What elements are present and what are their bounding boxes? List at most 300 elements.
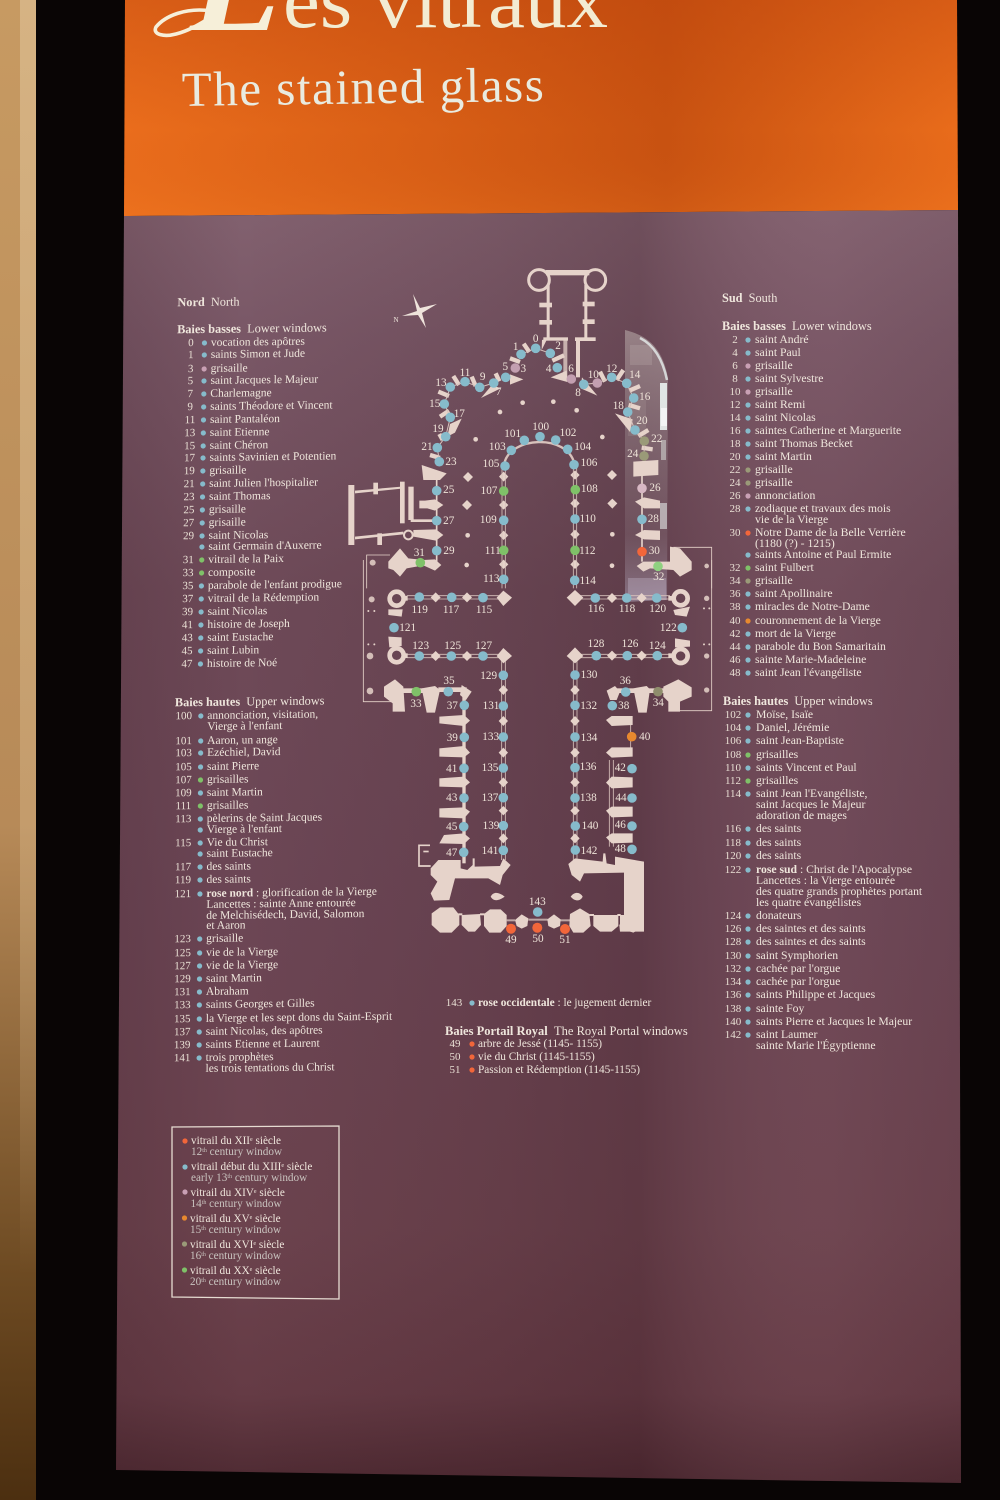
legend: 20th century: 20 [190, 1276, 201, 1288]
plan window numbers [399, 333, 677, 946]
legend: 16th century: siècle [256, 1239, 284, 1251]
plan window numbers: 41 [446, 763, 457, 775]
legend: 15th century: siècle [252, 1213, 281, 1225]
list: north upper windows: 129 [174, 973, 191, 985]
legend: early 13th century: early 13 [191, 1172, 227, 1184]
centre list: west rose and Royal Portal [445, 997, 688, 1076]
plan window numbers: 21 [421, 441, 433, 453]
list: south upper windows: donateurs [756, 909, 802, 922]
legend: 14th century: century window [206, 1198, 282, 1210]
list: south lower windows: 30 [730, 527, 741, 539]
legend box [172, 1126, 339, 1299]
plan window numbers: 141 [482, 845, 498, 857]
plan window numbers: 8 [575, 387, 581, 399]
legend: 12th century: century window [207, 1146, 283, 1158]
list: south lower windows: 10 [730, 386, 741, 398]
heading: Baies basses: Baies basses Lower windows [722, 319, 872, 333]
plan window numbers: 1 [513, 341, 518, 353]
list: north upper windows: 115 [175, 837, 192, 849]
legend: early 13th century [182, 1161, 312, 1184]
list: Royal Portal windows: 49 [450, 1038, 461, 1050]
list: north upper windows: 101 [175, 735, 192, 747]
plan window numbers: 112 [579, 545, 595, 557]
legend: 14th century: 14 [190, 1198, 202, 1210]
list: south upper windows: 134 [725, 976, 742, 988]
list: north lower windows: saint Thomas [209, 490, 271, 503]
plan window numbers: 4 [546, 363, 552, 375]
list: north upper windows: et Aaron [206, 919, 246, 932]
legend: 16th century: 16 [190, 1250, 201, 1262]
legend: 12th century: vitrail du XII [191, 1135, 250, 1147]
list: south upper windows: adoration de mages [756, 809, 847, 822]
south column: upper windows [723, 694, 923, 1052]
list: north lower windows: 5 [188, 375, 194, 387]
list: north upper windows: Vierge à l'enfant [207, 823, 283, 836]
legend: 12th century [182, 1135, 283, 1158]
list: north upper windows: saint Eustache [207, 847, 273, 860]
list: south lower windows: 14 [730, 412, 741, 424]
list: south upper windows: grisailles [756, 748, 799, 761]
legend: 15th century: th [201, 1226, 206, 1232]
list: north lower windows: grisaille [211, 362, 248, 375]
list: south lower windows: grisaille [755, 574, 793, 587]
list: south upper windows: 128 [725, 936, 742, 948]
plan window numbers: 134 [581, 732, 598, 744]
list: north upper windows: des saints [206, 873, 251, 886]
legend: early 13th century: e [281, 1163, 284, 1169]
list: south lower windows: saint Remi [755, 398, 806, 411]
plan window numbers: 44 [615, 792, 627, 804]
list: south lower windows: 44 [730, 641, 741, 653]
list: north lower windows: vitrail de la Rédemption [208, 592, 320, 605]
heading: Baies hautes: Baies hautes Upper windows [175, 694, 325, 709]
plan window numbers: 22 [651, 433, 662, 445]
legend: 14th century [182, 1187, 285, 1210]
plan window numbers: 19 [432, 423, 444, 435]
list: south upper windows: 114 [725, 788, 742, 800]
plan window numbers: 120 [649, 603, 666, 615]
plan window numbers: 16 [639, 391, 651, 403]
list: south upper windows [725, 708, 923, 1052]
list: south upper windows: 104 [725, 722, 742, 734]
title initial swash ornament [155, 10, 212, 35]
list: south upper windows: grisailles [756, 774, 799, 787]
list: north lower windows: 23 [183, 491, 195, 503]
heading: Baies basses: Baies basses Lower windows [177, 321, 327, 336]
plan window numbers: 24 [627, 448, 639, 460]
list: north upper windows: Ezéchiel, David [207, 746, 281, 759]
list: south lower windows: zodiaque et travaux des mois [755, 502, 891, 515]
list: south lower windows: 26 [730, 490, 741, 502]
list: south upper windows: 136 [725, 989, 742, 1001]
list: south lower windows: grisaille [755, 359, 793, 372]
list: north lower windows: 29 [183, 530, 195, 542]
list: south upper windows: cachée par l'orgue [756, 975, 840, 988]
list: south upper windows: Moïse, Isaïe [756, 708, 813, 721]
list: north lower windows: 39 [182, 606, 194, 618]
list: south lower windows: saints Antoine et Paul Ermite [755, 548, 891, 561]
list: south lower windows: 16 [730, 425, 741, 437]
list: south lower windows: 18 [730, 438, 741, 450]
list: north lower windows: 11 [185, 414, 195, 426]
list: south lower windows: saint Apollinaire [755, 587, 833, 600]
list: north lower windows: saint Chéron [210, 439, 268, 452]
plan window numbers: 115 [476, 604, 493, 616]
list: south lower windows: 24 [730, 477, 741, 489]
plan window numbers: 103 [489, 441, 506, 453]
list: south lower windows: miracles de Notre-Dame [755, 600, 870, 613]
list: north lower windows: 21 [184, 478, 195, 490]
list: north upper windows [174, 708, 395, 1075]
plan window numbers: 127 [475, 640, 492, 652]
list: north upper windows: 139 [174, 1039, 191, 1051]
list: south lower windows: 2 [732, 334, 738, 346]
list: north lower windows: 31 [183, 554, 194, 566]
list: north lower windows: composite [208, 566, 255, 579]
legend: 20th century: th [201, 1278, 206, 1284]
plan window numbers: 47 [446, 847, 458, 859]
list: south lower windows: vie de la Vierge [755, 513, 828, 526]
plan window numbers: 113 [483, 573, 500, 585]
list: north upper windows: pèlerins de Saint Jacques [207, 812, 323, 825]
subtitle: The stained glass [181, 57, 544, 117]
list: north upper windows: rose nord : glorification de la Vierge [206, 886, 377, 900]
legend: 16th century: th [201, 1252, 206, 1258]
list: south lower windows: saint Martin [755, 450, 812, 463]
legend: 16th century: century window [206, 1250, 282, 1262]
plan window numbers: 27 [443, 515, 455, 527]
south column: lower windows [722, 291, 906, 679]
list: north upper windows: saint Martin [206, 972, 262, 985]
list: Royal Portal windows: 51 [450, 1064, 460, 1076]
list: south lower windows: saint Fulbert [755, 561, 815, 574]
list: south upper windows: 118 [725, 837, 742, 849]
list: north lower windows: saint Etienne [210, 426, 270, 439]
list: Royal Portal windows: arbre de Jessé (1145- 1155) [478, 1038, 602, 1050]
list: south upper windows: saint Laumer [756, 1028, 817, 1041]
list: north upper windows: des saints [207, 860, 252, 873]
legend: 14th century: e [254, 1189, 257, 1195]
list: north lower windows: saints Savinien et Potentien [209, 450, 337, 464]
list: south lower windows: mort de la Vierge [755, 627, 836, 640]
list: north lower windows: saint Eustache [207, 631, 273, 644]
plan window numbers: 35 [443, 675, 455, 687]
list: north lower windows: histoire de Noé [207, 657, 277, 670]
purple plan panel [116, 210, 961, 1483]
list: north lower windows: 27 [183, 517, 195, 529]
plan window numbers: 6 [568, 363, 574, 375]
plan window numbers: 129 [480, 670, 497, 682]
plan window numbers: 2 [555, 340, 561, 352]
list: north lower windows: saint Nicolas [208, 605, 268, 618]
plan window numbers: 51 [559, 934, 571, 946]
plan window numbers: 118 [619, 603, 636, 615]
list: north upper windows: les trois tentations du Christ [206, 1061, 335, 1075]
plan window numbers: 43 [446, 792, 458, 804]
list: north upper windows: 137 [174, 1026, 191, 1038]
list: Royal Portal windows: Passion et Rédemption (1145-1155) [478, 1064, 640, 1076]
plan window numbers: 109 [480, 514, 497, 526]
plan walls: choir and apse [348, 270, 712, 588]
list: north upper windows: grisailles [207, 773, 249, 786]
plan window numbers: 137 [482, 792, 499, 804]
heading: Baies hautes: Baies hautes Upper windows [723, 694, 873, 708]
plan window numbers: 30 [649, 545, 660, 557]
list: north lower windows: 19 [184, 465, 195, 477]
plan window numbers: 102 [560, 427, 576, 439]
legend: 20th century: siècle [252, 1265, 281, 1277]
list: south upper windows: 142 [725, 1029, 741, 1041]
legend: 12th century: 12 [191, 1146, 202, 1158]
plan window numbers: 110 [580, 513, 596, 525]
list: south lower windows: 20 [730, 451, 741, 463]
plan window numbers: 40 [639, 731, 651, 743]
plan window numbers: 143 [529, 896, 546, 908]
list: south upper windows: 116 [725, 823, 742, 835]
list: north lower windows: 3 [188, 363, 194, 375]
plan window numbers: 38 [618, 700, 630, 712]
list: south lower windows: 32 [730, 562, 740, 574]
legend: 14th century: vitrail du XIV [190, 1187, 254, 1199]
list: north lower windows: saint Germain d'Auxerre [208, 540, 322, 553]
list: north lower windows: 0 [188, 337, 194, 349]
plan window numbers: 3 [521, 363, 527, 375]
list: north upper windows: 135 [174, 1013, 191, 1025]
list: south upper windows: sainte Foy [756, 1002, 805, 1015]
list: north lower windows: grisaille [209, 464, 246, 477]
list: north lower windows: 9 [187, 401, 193, 413]
list: south lower windows: saint André [755, 333, 809, 346]
legend: 14th century: siècle [257, 1187, 285, 1199]
list: south lower windows: 34 [730, 575, 741, 587]
plan window numbers: 0 [533, 333, 539, 345]
list: south lower windows: Notre Dame de la Belle Verrière [755, 526, 906, 539]
list: north upper windows: 103 [175, 747, 192, 759]
plan window numbers: 121 [399, 622, 416, 634]
list: south upper windows: saints Vincent et Paul [756, 761, 857, 774]
list: south upper windows: 140 [725, 1016, 742, 1028]
list: south lower windows: grisaille [755, 476, 793, 489]
legend: early 13th century: century window [232, 1172, 308, 1184]
list: Royal Portal windows [450, 1038, 640, 1076]
list: south upper windows: saints Pierre et Jacques le Majeur [756, 1015, 912, 1028]
plan window numbers: 140 [582, 820, 599, 832]
list: north lower windows: Charlemagne [210, 387, 272, 400]
plan window numbers: 105 [483, 458, 500, 470]
north column: upper windows [173, 693, 395, 1075]
list: north lower windows: 1 [188, 349, 194, 361]
plan window numbers: 139 [483, 820, 500, 832]
list: south upper windows: 126 [725, 923, 742, 935]
legend: 15th century: century window [206, 1224, 282, 1236]
north column: lower windows [173, 293, 346, 670]
list: south upper windows: 130 [725, 950, 742, 962]
list: south upper windows: rose sud : Christ de l'Apocalypse [756, 863, 912, 876]
legend: early 13th century: siècle [284, 1161, 312, 1173]
list: north lower windows: 17 [184, 452, 196, 464]
list: north upper windows: grisaille [206, 932, 243, 945]
plan window numbers: 50 [532, 933, 544, 945]
plan window numbers: 28 [648, 513, 659, 525]
plan window numbers: 107 [481, 485, 498, 497]
list: south lower windows: 38 [730, 601, 741, 613]
list: south lower windows: saint Nicolas [755, 411, 816, 424]
list: south upper windows: 108 [725, 749, 742, 761]
list: south lower windows: 28 [730, 503, 741, 515]
list: south upper windows: 110 [725, 762, 742, 774]
list: south upper windows: des quatre grands prophètes portant [756, 885, 923, 898]
west rose entry: rose occidentale : le jugement dernier [478, 997, 652, 1009]
list: north lower windows: parabole de l'enfant prodigue [208, 578, 342, 592]
legend: 12th century: th [202, 1148, 207, 1154]
plan window numbers: 119 [412, 604, 428, 616]
list: north upper windows: 123 [174, 933, 191, 945]
plan window numbers: 106 [581, 457, 598, 469]
list: north upper windows: saint Martin [207, 786, 263, 799]
list: north upper windows: Abraham [206, 985, 249, 998]
plan window numbers: 45 [446, 821, 458, 833]
list: north upper windows: 131 [174, 986, 191, 998]
list: south lower windows: 6 [732, 360, 738, 372]
plan window numbers: 20 [636, 415, 648, 427]
plan window numbers: 128 [588, 638, 605, 650]
list: north upper windows: 119 [175, 874, 192, 886]
orange header panel [124, 0, 958, 216]
list: south lower windows: 48 [730, 667, 741, 679]
legend: 20th century [182, 1265, 282, 1288]
list: south lower windows: saint Paul [755, 346, 802, 359]
list: north lower windows: 43 [182, 632, 193, 644]
plan window numbers: 117 [443, 604, 460, 616]
plan window numbers: 29 [443, 545, 455, 557]
list: north lower windows: 45 [182, 645, 193, 657]
list: south upper windows: 112 [725, 775, 741, 787]
list: south upper windows: Daniel, Jérémie [756, 721, 829, 734]
plan window numbers: 101 [504, 428, 521, 440]
plan window numbers: 48 [615, 843, 626, 855]
heading: Baies Portail Royal: Baies Portail Royal The Royal Portal windows [445, 1024, 688, 1038]
plan window numbers: 100 [532, 421, 549, 433]
plan window numbers: 132 [580, 700, 597, 712]
list: north upper windows: Vie du Christ [207, 836, 269, 849]
legend: 16th century: e [253, 1241, 256, 1247]
legend: 15th century: 15 [190, 1224, 201, 1236]
plan window numbers: 123 [412, 640, 429, 652]
list: south upper windows: des saints [756, 836, 802, 849]
legend: early 13th century: vitrail début du XIII [191, 1161, 281, 1173]
plan window numbers: 126 [622, 638, 639, 650]
list: south upper windows: 120 [725, 850, 742, 862]
list: south lower windows: 4 [732, 347, 738, 359]
list: north lower windows: saint Lubin [207, 644, 259, 657]
compass [393, 294, 437, 328]
legend: 20th century: century window [206, 1276, 282, 1288]
list: north lower windows [181, 335, 345, 670]
list: south lower windows: parabole du Bon Samaritain [755, 640, 886, 653]
list: south upper windows: des saintes et des saints [756, 935, 866, 948]
list: north upper windows: 105 [175, 761, 192, 773]
list: north upper windows: saints Georges et Gilles [206, 998, 315, 1011]
list: south upper windows: 124 [725, 910, 742, 922]
list: north lower windows: 35 [182, 580, 194, 592]
list: north upper windows: 107 [175, 774, 192, 786]
list: south upper windows: des saints [756, 822, 802, 835]
list: south upper windows: 102 [725, 709, 741, 721]
list: south upper windows: des saintes et des saints [756, 922, 866, 935]
list: south upper windows: les quatre évangélistes [756, 896, 862, 909]
list: north upper windows: vie de la Vierge [206, 959, 278, 972]
plan window numbers: 116 [588, 603, 605, 615]
list: north upper windows: 117 [175, 861, 192, 873]
list: south upper windows: 132 [725, 963, 741, 975]
plan window numbers: 138 [580, 792, 597, 804]
plan window numbers: 9 [480, 371, 486, 383]
legend: 14th century: th [202, 1200, 206, 1206]
list: south upper windows: Lancettes : la Vierge entourée [756, 874, 895, 887]
title [155, 0, 608, 56]
list: north upper windows: saint Pierre [207, 760, 259, 773]
list: north lower windows: 7 [188, 388, 194, 400]
plan window numbers: 23 [445, 456, 457, 468]
list: north upper windows: 109 [175, 787, 192, 799]
list: north lower windows: saints Simon et Jude [211, 348, 305, 361]
plan window numbers: 124 [649, 640, 666, 652]
list: north lower windows: 13 [184, 427, 196, 439]
list: south upper windows: saint Jean l'Evangéliste, [756, 787, 868, 800]
list: south upper windows: des saints [756, 849, 802, 862]
list: Royal Portal windows: vie du Christ (1145-1155) [478, 1051, 595, 1063]
list: south lower windows: 40 [730, 615, 741, 627]
plan window numbers: 5 [503, 361, 509, 373]
plan window numbers: 125 [444, 640, 461, 652]
list: north upper windows: grisailles [207, 799, 249, 812]
list: north upper windows: 100 [176, 710, 193, 722]
list: south lower windows: sainte Marie-Madeleine [755, 653, 866, 666]
plan window numbers: 142 [581, 845, 597, 857]
list: south lower windows: couronnement de la Vierge [755, 614, 881, 627]
plan window numbers: 136 [580, 761, 597, 773]
list: north upper windows: 127 [174, 960, 191, 972]
plan window numbers: 114 [580, 575, 596, 587]
plan walls: transepts and nave [363, 560, 712, 933]
list: south upper windows: saint Jean-Baptiste [756, 734, 844, 747]
list: north upper windows: saint Nicolas, des apôtres [206, 1025, 323, 1038]
plan window numbers: 36 [620, 675, 631, 687]
legend: 15th century [182, 1213, 282, 1236]
plan window numbers: 104 [574, 441, 591, 453]
list: south upper windows: saints Philippe et Jacques [756, 988, 876, 1001]
list: south upper windows: saint Symphorien [756, 949, 838, 962]
legend: 12th century: siècle [253, 1135, 281, 1147]
legend: 12th century: e [250, 1137, 253, 1143]
list: north upper windows: Lancettes : sainte Anne entourée [206, 897, 356, 911]
plan window numbers: 33 [410, 698, 422, 710]
list: south lower windows: 36 [730, 588, 741, 600]
list: north upper windows: Aaron, un ange [207, 734, 278, 747]
list: north upper windows: 141 [174, 1052, 190, 1064]
plan window numbers: 32 [653, 571, 664, 583]
wall beside the frame [0, 0, 38, 1500]
list: south upper windows: 138 [725, 1003, 742, 1015]
list: north upper windows: de Melchisédech, David, Salomon [206, 908, 365, 922]
list: north lower windows: 15 [184, 440, 196, 452]
list: north upper windows: annonciation, visitation, [207, 709, 318, 722]
legend: 16th century: vitrail du XVI [190, 1239, 253, 1251]
plan window numbers: 130 [581, 669, 598, 681]
list: south upper windows: cachée par l'orgue [756, 962, 840, 975]
compass: N [393, 316, 399, 324]
list: south lower windows: 46 [730, 654, 741, 666]
